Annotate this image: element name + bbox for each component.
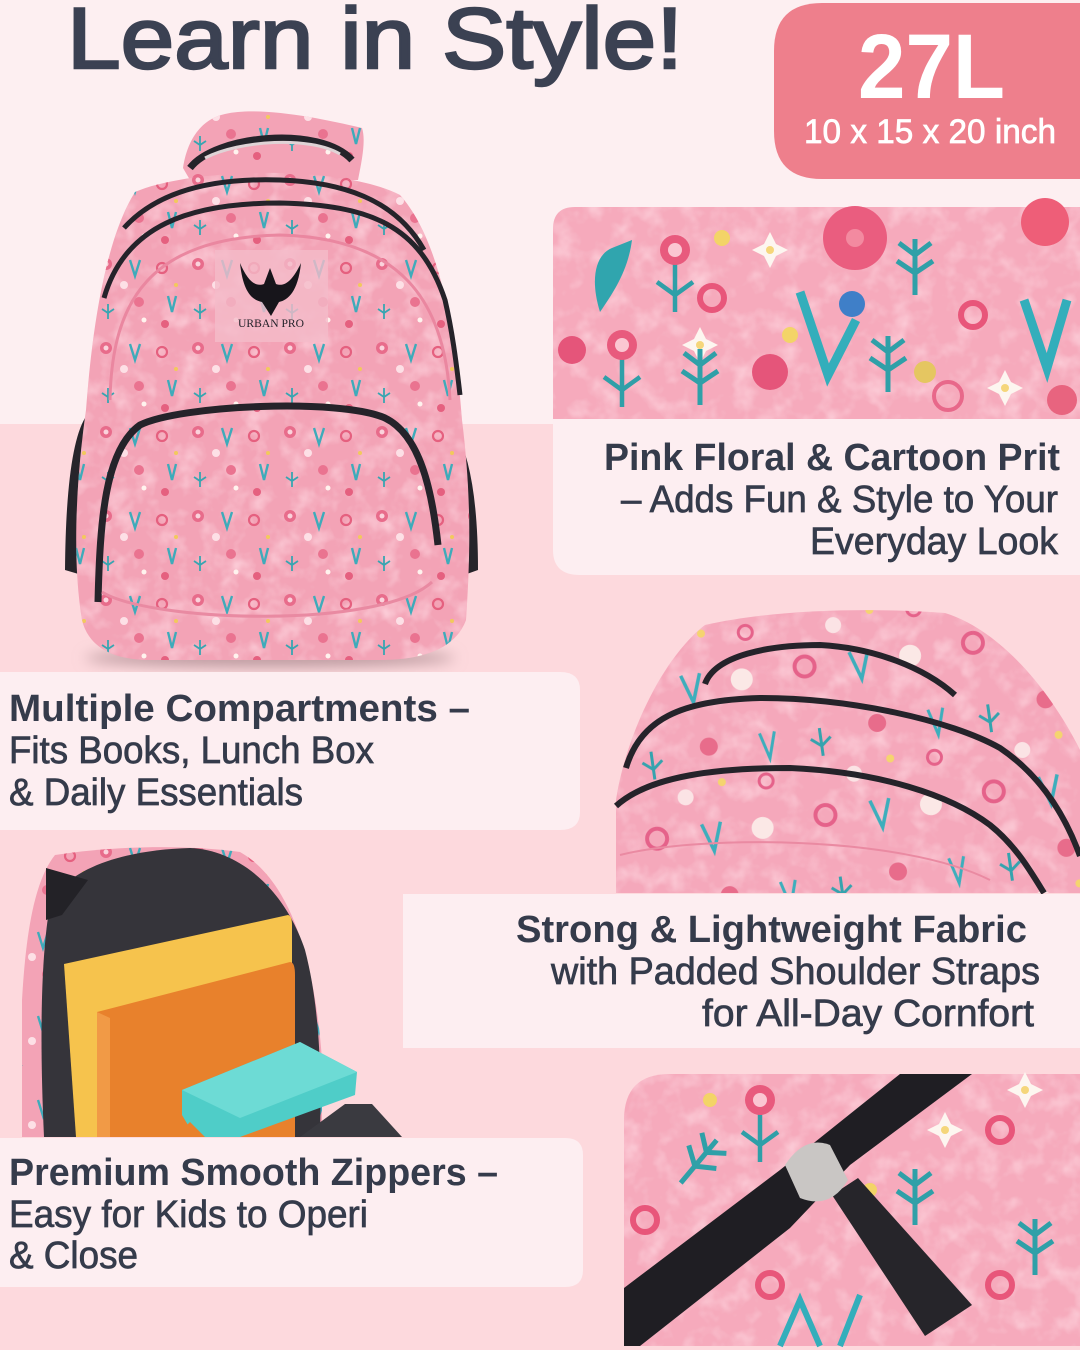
photo: zipper close-up: [624, 1072, 1080, 1346]
yellow book: [64, 915, 292, 1137]
zipper pull tab: [832, 1178, 972, 1336]
description: Easy for Kids to Operi: [9, 1194, 368, 1236]
description: [621, 479, 1059, 563]
heading: Premium Smooth Zippers –: [9, 1152, 498, 1194]
fabric print: [616, 610, 1080, 893]
heading: Strong & Lightweight Fabric: [516, 909, 1027, 951]
logo text: URBAN PRO: [238, 316, 304, 330]
description: with Padded Shoulder Straps: [550, 951, 1040, 993]
description: Everyday Look: [810, 521, 1059, 563]
logo patch: [215, 250, 328, 342]
fabric mottling: [553, 207, 1080, 419]
description: Fits Books, Lunch Box: [9, 730, 374, 772]
size badge: [774, 3, 1080, 179]
zipper tape: [624, 1074, 972, 1346]
fabric mottling: [616, 610, 1080, 893]
capacity: 27L: [858, 16, 1005, 118]
body: [76, 173, 469, 660]
side pockets: [65, 418, 478, 580]
panel: compartments: [0, 672, 580, 830]
description: [9, 1194, 368, 1277]
description: – Adds Fun & Style to Your: [621, 479, 1058, 521]
description: & Close: [9, 1235, 138, 1277]
top handle: [183, 111, 364, 180]
description: [550, 951, 1040, 1035]
photo: open backpack with books: [22, 847, 402, 1137]
bag interior: [42, 848, 320, 1137]
description: for All-Day Cornfort: [702, 993, 1034, 1035]
zippers: [124, 180, 424, 250]
panel: zippers: [0, 1138, 583, 1287]
main backpack illustration: [65, 111, 478, 667]
logo eagle: [240, 263, 301, 316]
zipper slider: [785, 1142, 848, 1201]
front pocket zipper: [98, 406, 438, 602]
lunch box: [182, 1042, 357, 1137]
photo: top of backpack fabric: [616, 610, 1080, 893]
bag shell: [22, 847, 322, 1137]
heading: Pink Floral & Cartoon Prit: [604, 437, 1060, 479]
heading: Multiple Compartments –: [9, 688, 470, 730]
description: & Daily Essentials: [9, 772, 303, 814]
dimensions: 10 x 15 x 20 inch: [804, 113, 1056, 151]
panel: fabric: [403, 894, 1080, 1048]
orange book: [97, 962, 295, 1137]
body print: [76, 173, 469, 660]
photo: floral print close-up: [553, 198, 1080, 419]
dark pouch: [300, 1104, 402, 1137]
panel: floral print: [553, 419, 1080, 575]
description: [9, 730, 374, 814]
body mottling: [76, 173, 469, 660]
fabric mottling: [624, 1074, 1080, 1346]
